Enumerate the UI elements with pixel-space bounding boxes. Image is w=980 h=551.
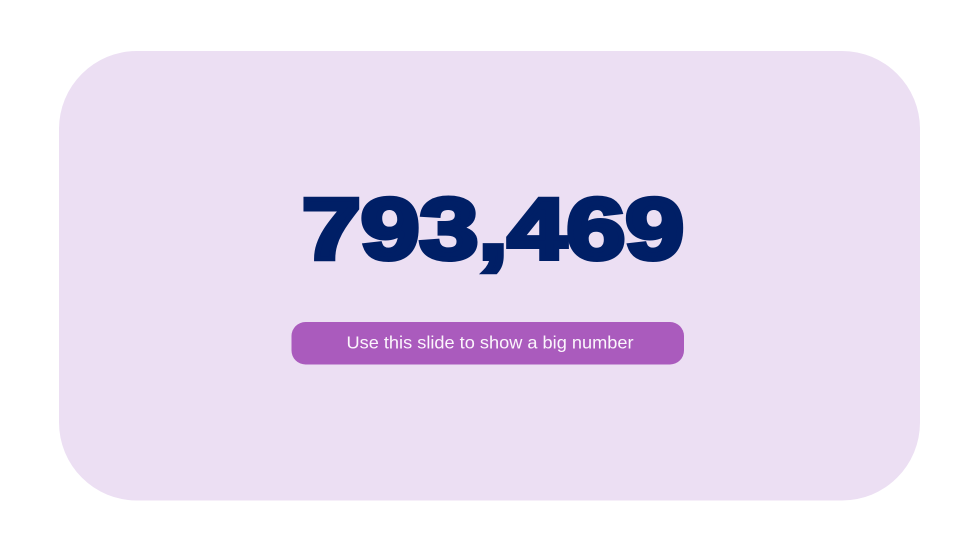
pill background <box>292 322 684 364</box>
panel: background card <box>59 51 920 500</box>
big number: 793,469 <box>302 182 684 278</box>
caption text: Use this slide to show a big number <box>346 332 634 352</box>
caption pill <box>292 322 684 364</box>
